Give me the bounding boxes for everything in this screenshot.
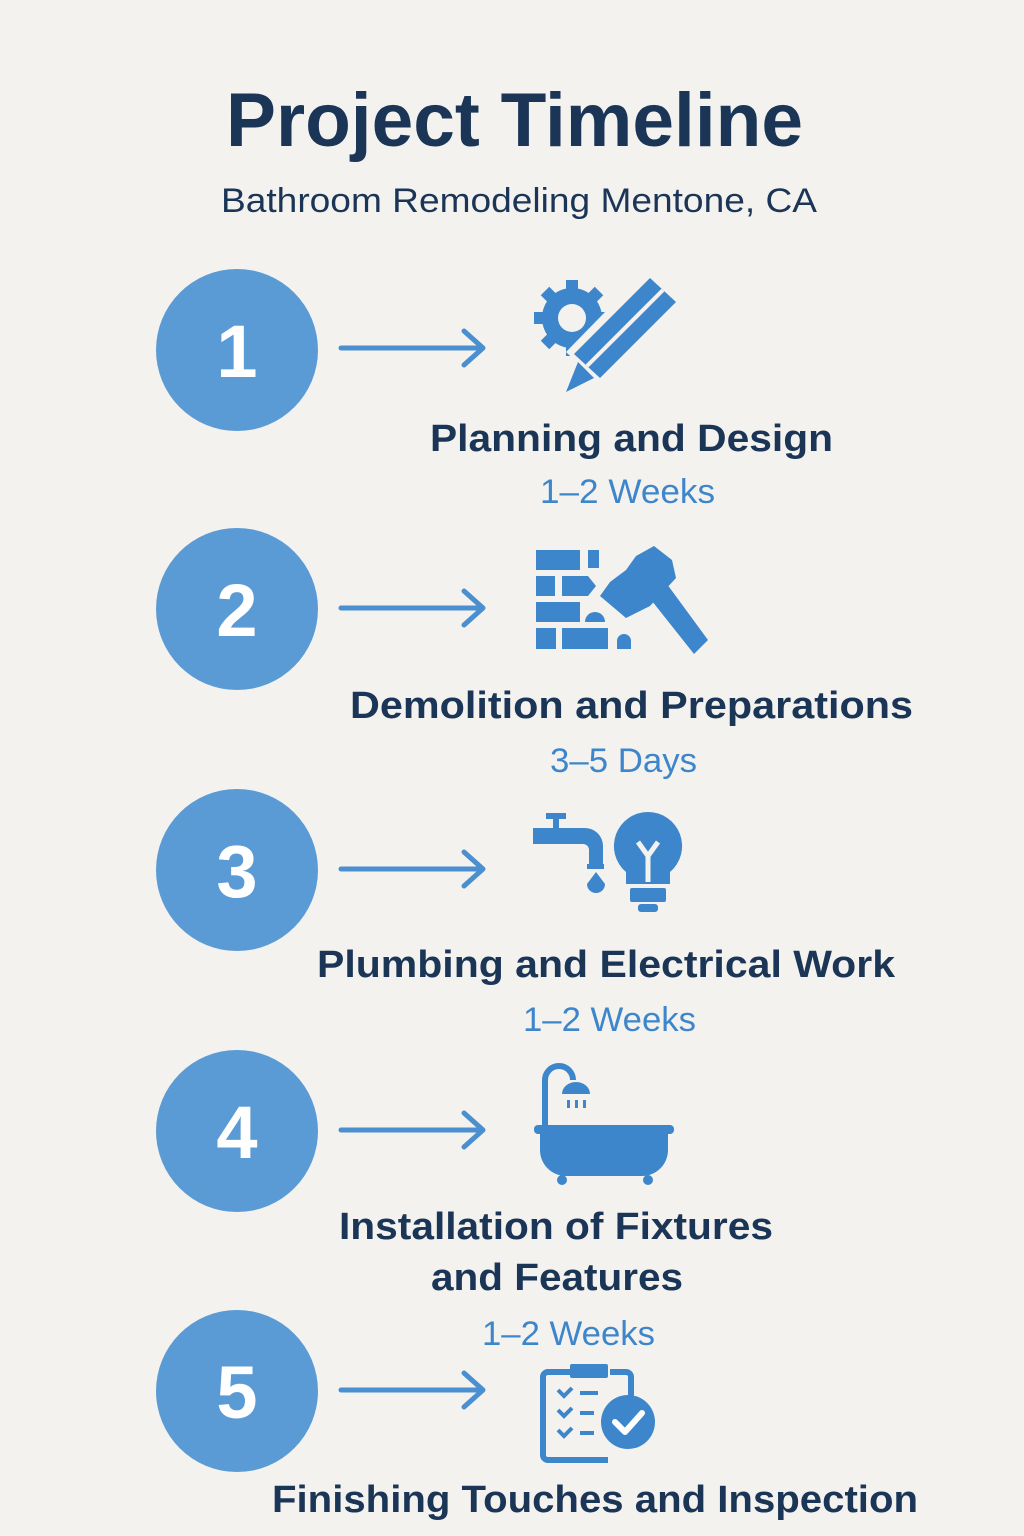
icon: bathtub [534, 1066, 674, 1185]
label 2: Demolition and Preparations [350, 685, 913, 727]
arrow 5 [341, 1373, 483, 1407]
duration 4: 1–2 Weeks [482, 1315, 655, 1353]
arrow 3 [341, 852, 483, 886]
arrow 4 [341, 1113, 483, 1147]
icon: checklist [543, 1364, 655, 1460]
icon: gear and pencil [534, 270, 684, 392]
arrow 2 [341, 591, 483, 625]
number circle 4: 4 [216, 1091, 258, 1174]
step 1 [156, 269, 833, 511]
icon: bricks and hammer [536, 546, 708, 654]
step 2 [156, 528, 913, 780]
label 4: Installation of Fixtures [339, 1206, 773, 1248]
number circle 3 [156, 789, 318, 951]
label 4: and Features [431, 1257, 683, 1299]
label 1: Planning and Design [430, 418, 833, 460]
duration 1: 1–2 Weeks [540, 473, 715, 511]
step 5 [156, 1310, 918, 1521]
duration 3: 1–2 Weeks [523, 1001, 696, 1039]
label 4 [339, 1206, 773, 1299]
arrow 1 [341, 331, 483, 365]
step 3 [156, 789, 896, 1039]
number circle 2 [156, 528, 318, 690]
duration 2: 3–5 Days [550, 742, 697, 780]
label 3: Plumbing and Electrical Work [317, 944, 896, 986]
number circle 5: 5 [216, 1351, 258, 1434]
step 4 [156, 1050, 773, 1353]
icon: faucet and bulb [533, 812, 682, 912]
number circle 2: 2 [216, 569, 258, 652]
number circle 4 [156, 1050, 318, 1212]
subtitle: Bathroom Remodeling Mentone, CA [221, 182, 817, 220]
title: Project Timeline [226, 78, 803, 163]
number circle 3: 3 [216, 830, 258, 913]
number circle 1: 1 [216, 310, 258, 393]
number circle 5 [156, 1310, 318, 1472]
number circle 1 [156, 269, 318, 431]
label 5: Finishing Touches and Inspection [272, 1479, 918, 1521]
